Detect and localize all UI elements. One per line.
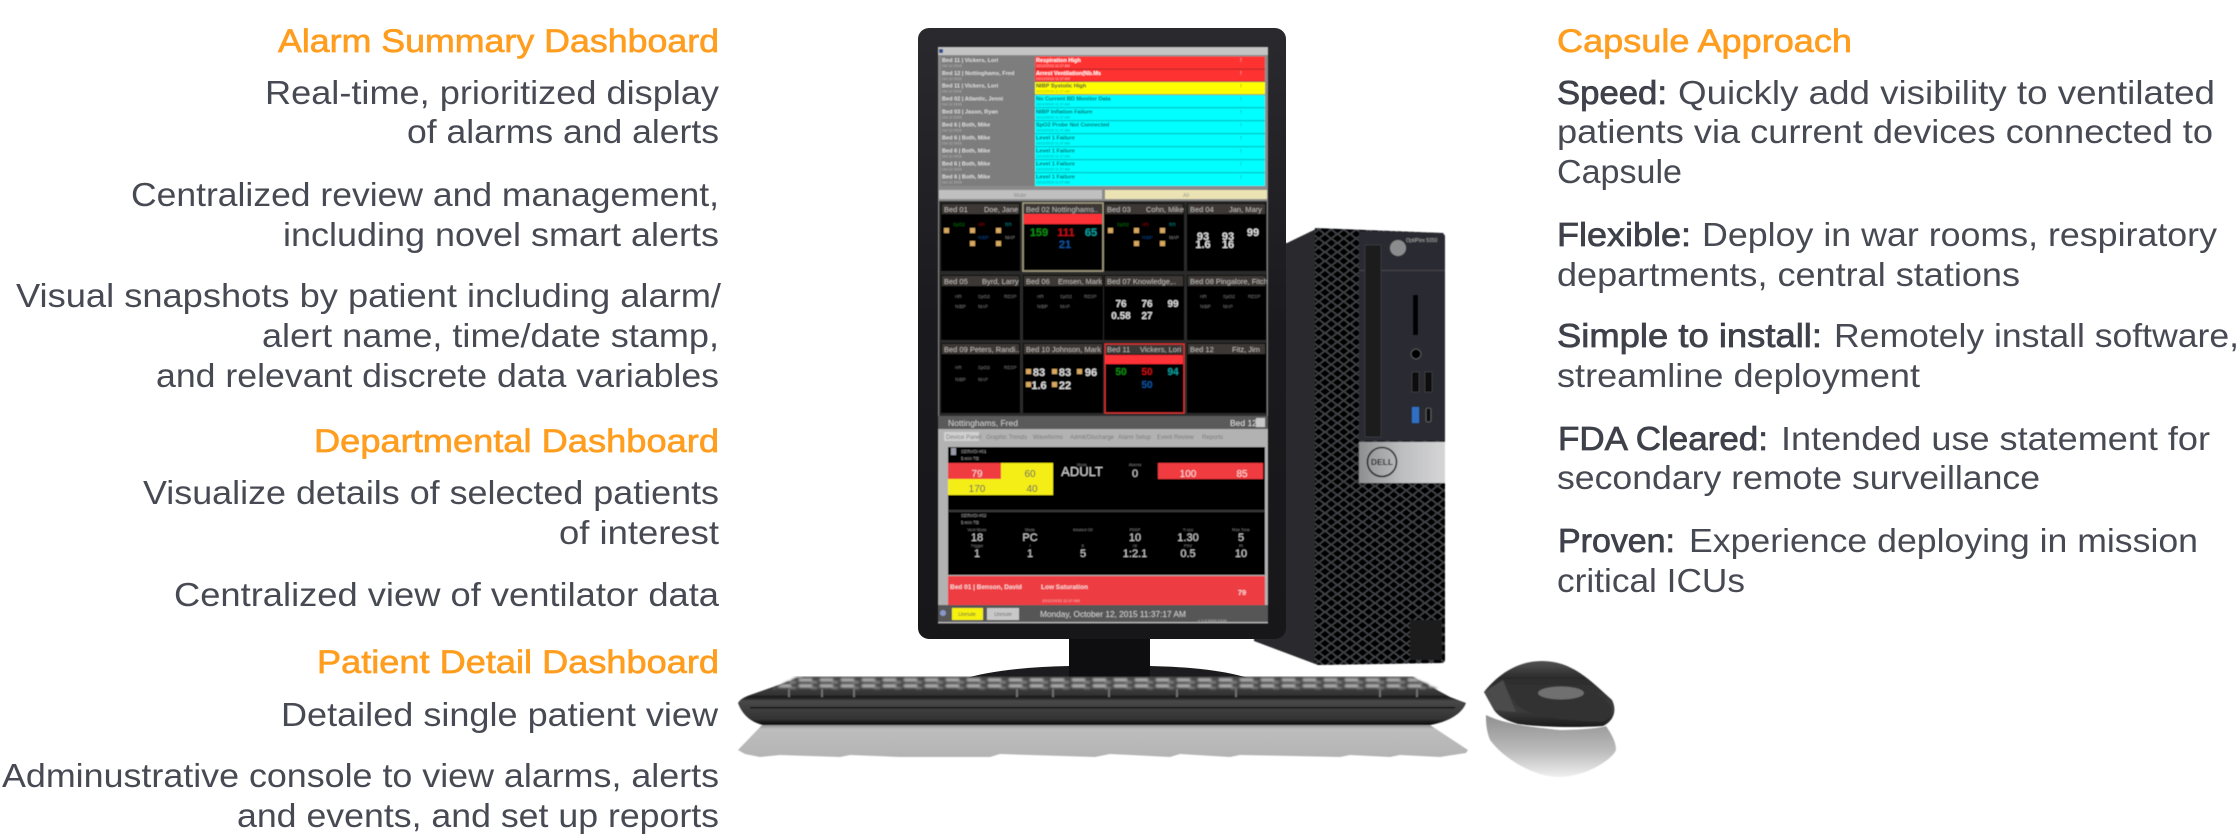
bed grid: Bed 06: [1026, 277, 1050, 286]
bed grid: Jan, Mary: [1229, 205, 1262, 214]
bed vitals: 50: [1115, 367, 1127, 378]
bed grid: HR: [1200, 294, 1207, 299]
device values: alarm tiles: ADULT: [1061, 464, 1103, 479]
bed vitals: 1.6: [1195, 239, 1211, 251]
filter buttons: [939, 190, 1267, 199]
bed grid: Bed 03: [1107, 205, 1131, 214]
ventilator values: [971, 532, 1247, 560]
alarm summary table: 10/12/2015 11:37 AM: [1036, 142, 1070, 146]
bed grid: HR: [978, 222, 985, 227]
alarm summary table: SpO2 Probe Not Connected: [1036, 122, 1110, 128]
bed vitals: 16: [1222, 239, 1234, 251]
text: real-time display: Real-time, prioritized display: [265, 74, 720, 111]
bed grid: NIBP: [1142, 235, 1153, 240]
bed grid: Bed 09 Peters, Randi..: [944, 345, 1019, 354]
text: visual snapshots: Visual snapshots by patient including alarm/: [16, 277, 722, 314]
bed grid: HR: [1142, 222, 1149, 227]
heading: Departmental Dashboard: Departmental Dashboard: [314, 423, 719, 459]
patient detail panel: Rise Time: [1232, 527, 1251, 532]
text: proven: [1557, 522, 2198, 599]
bed vitals: 96: [1085, 367, 1097, 379]
text: speed: patients via current devices connected to: [1557, 113, 2213, 150]
alarm summary table: Bed 11 | Vickers, Lori: [942, 58, 999, 64]
alarm summary table: No Current BD Monitor Data: [1036, 96, 1111, 102]
alarm summary table: Oct 12 2015: [942, 154, 962, 158]
bed grid: SpO2: [1117, 222, 1129, 227]
alarm summary table: Bed 03 | Jason, Ryan: [942, 110, 999, 116]
bed grid: Bed 12: [1190, 345, 1214, 354]
text: centralized review: [131, 176, 719, 253]
filter buttons: All: [1183, 193, 1189, 199]
text: real-time display: of alarms and alerts: [407, 113, 719, 150]
text: visual snapshots: and relevant discrete data variables: [156, 357, 719, 394]
text: proven: critical ICUs: [1557, 562, 1745, 599]
bed grid: NIBP: [955, 304, 966, 309]
text: visual snapshots: [16, 277, 722, 394]
patient detail panel: E: [1082, 543, 1085, 548]
device values: alarm tiles: [948, 463, 1263, 495]
alarm summary table: 10/12/2015 11:37 AM: [1036, 168, 1070, 172]
ventilator values: 5: [1238, 532, 1244, 544]
status bar: Monday, October 12, 2015 11:37:17 AM: [1040, 609, 1186, 619]
alarm summary table: Respiration High: [1036, 58, 1081, 64]
patient detail tabs: Graphic Trends: [986, 435, 1027, 441]
bed grid: HR: [955, 365, 962, 370]
alarm summary table: Level 1 Failure: [1036, 148, 1075, 154]
bed vitals: 0.58: [1111, 311, 1131, 322]
alarm summary table: 10/12/2015 11:37 AM: [1036, 180, 1070, 184]
alarm summary table: Bed 6 | Both, Mike: [942, 174, 990, 180]
text: centralized review: including novel smart alerts: [283, 216, 719, 253]
patient alarm band: Bed 01 | Benson, David: [950, 584, 1022, 591]
text: simple to install: [1557, 317, 2239, 394]
device values: alarm tiles: 79: [971, 469, 983, 480]
patient detail panel: Vent Mode: [967, 527, 987, 532]
alarm summary table: 10/12/2015 11:37 AM: [1036, 90, 1070, 94]
text: simple to install: Simple to install:: [1557, 317, 1822, 354]
monitor: [918, 28, 1286, 639]
monitor bezel: [918, 28, 1286, 639]
bed grid: Bed 07 Knowledge,..: [1107, 277, 1176, 286]
bed vitals: 50: [1141, 367, 1153, 378]
keyboard keys: [772, 677, 1438, 689]
alarm summary table: Bed 02 | Atlantic, Jenni: [942, 96, 1003, 102]
patient alarm band: Low Saturation: [1041, 584, 1088, 591]
text: administrative console: Adminustrative console to view alarms, alerts: [2, 757, 719, 794]
bed grid: Bed 02 Nottinghams..: [1026, 205, 1098, 214]
text: speed: Speed:: [1557, 74, 1667, 111]
bed vitals: 99: [1247, 227, 1259, 239]
bed grid: SpO2: [978, 294, 990, 299]
patient detail panel: PSV: [1184, 543, 1192, 548]
text: visualize details: [143, 474, 719, 551]
bed vitals: 93: [1222, 231, 1234, 243]
status bar: v 1.0.0000.0100: [1198, 618, 1227, 623]
text: centralized review: Centralized review and management,: [131, 176, 719, 213]
bed grid: Emsen, Mark: [1058, 277, 1102, 286]
text: simple to install: Remotely install software,: [1834, 317, 2239, 354]
bed vitals: 27: [1141, 311, 1153, 322]
power button: [1390, 240, 1406, 256]
alarm summary table: Oct 12 2015: [942, 77, 962, 81]
alarm summary table: Bed 11 | Vickers, Lori: [942, 84, 999, 90]
alarm summary table: !: [1240, 123, 1242, 129]
bed grid: Fitz, Jim: [1232, 345, 1260, 354]
alarm summary table: 10/12/2015 11:37 AM: [1036, 64, 1070, 68]
bed vitals: 50: [1141, 380, 1153, 391]
alarm summary table: !: [1240, 84, 1242, 90]
left column: dashboard descriptions: [2, 23, 722, 834]
patient detail panel: [938, 416, 1268, 605]
heading: Patient Detail Dashboard: Patient Detail Dashboard: [317, 644, 719, 680]
keyboard: [738, 677, 1466, 725]
status bar: [938, 605, 1268, 624]
patient detail panel: Mode: [1077, 462, 1088, 467]
alarm summary table: 10/12/2015 11:37 AM: [1036, 128, 1070, 132]
bed vitals: 99: [1167, 299, 1179, 310]
alarm summary table: NIBP Systolic High: [1036, 84, 1087, 90]
bed vitals: 93: [1197, 231, 1209, 243]
text: visualize details: Visualize details of selected patients: [143, 474, 719, 511]
alarm summary table: Level 1 Failure: [1036, 162, 1075, 168]
selected bed highlight: [1023, 203, 1184, 413]
alarm summary table: !: [1240, 71, 1242, 77]
bed grid: SpO2: [1223, 294, 1235, 299]
reflection: keyboard: [738, 725, 1468, 757]
alarm summary table: Bed 6 | Both, Mike: [942, 136, 990, 142]
bed grid: SpO2: [978, 365, 990, 370]
patient detail panel: Pi: [1239, 543, 1243, 548]
text: flexible: Deploy in war rooms, respiratory: [1702, 216, 2218, 253]
alarm summary table: !: [1240, 110, 1242, 116]
filter buttons: Mute: [1014, 193, 1026, 199]
alarm summary table: !: [1240, 162, 1242, 168]
device values: alarm tiles: 60: [1024, 469, 1036, 480]
monitor stand neck: [1069, 636, 1150, 680]
alarm summary table: Oct 12 2015: [942, 180, 962, 184]
bed grid: Bed 01: [944, 205, 968, 214]
text: FDA cleared: secondary remote surveillance: [1557, 459, 2040, 496]
patient alarm band: 10/12/2015 11:37 AM: [1042, 598, 1080, 603]
alarm summary table: Oct 12 2015: [942, 142, 962, 146]
bed grid: Doe, Jane: [984, 205, 1018, 214]
text: speed: Quickly add visibility to ventilated: [1678, 74, 2215, 111]
patient detail panel: Ti sec: [1183, 527, 1193, 532]
alarm summary table: !: [1240, 97, 1242, 103]
alarm summary table: Bed 6 | Both, Mike: [942, 162, 990, 168]
bed grid: NIBP: [978, 235, 989, 240]
bed grid: [939, 201, 1268, 416]
text: centralized view: Centralized view of ventilator data: [174, 576, 720, 613]
ventilator values: 1: [1027, 548, 1033, 560]
bed grid: Byrd, Larry: [982, 277, 1019, 286]
alarm summary table: Bed 6 | Both, Mike: [942, 122, 990, 128]
alarm summary table: Oct 12 2015: [942, 116, 962, 120]
monitor stand base: [960, 666, 1255, 680]
ventilator values: 18: [971, 532, 983, 544]
bed vitals: 83: [1033, 367, 1045, 379]
patient detail panel: Mode: [1025, 527, 1036, 532]
patient detail panel: Alarms: [1129, 462, 1141, 467]
alarm summary table: Level 1 Failure: [1036, 136, 1075, 142]
device values: alarm tiles: 100: [1180, 469, 1197, 480]
alarm summary table: Oct 12 2015: [942, 90, 962, 94]
alarm summary table: !: [1240, 58, 1242, 64]
ventilator values: 5: [1080, 548, 1086, 560]
device values: alarm tiles: 85: [1236, 469, 1248, 480]
bed grid: SpO2: [1060, 294, 1072, 299]
ventilator values: 1.30: [1177, 532, 1199, 544]
alarm summary table: 10/12/2015 11:37 AM: [1036, 77, 1070, 81]
text: speed: [1557, 74, 2215, 190]
bed grid: Bed 10 Johnson, Mark: [1026, 345, 1101, 354]
alarm summary table: !: [1240, 149, 1242, 155]
bed vitals: 83: [1059, 367, 1071, 379]
text: speed: Capsule: [1557, 153, 1682, 190]
ventilator values: 1:2.1: [1123, 548, 1147, 560]
patient detail tabs: Reports: [1202, 435, 1223, 441]
text: flexible: [1557, 216, 2218, 293]
bed grid: HR: [955, 294, 962, 299]
patient alarm band: 79: [1238, 588, 1246, 597]
text: flexible: departments, central stations: [1557, 256, 2020, 293]
patient detail panel: PEEP: [1130, 527, 1141, 532]
patient detail panel: Trigger: [971, 543, 984, 548]
device values: alarm tiles: 170: [969, 484, 986, 495]
alarm summary table: Bed 6 | Both, Mike: [942, 148, 990, 154]
bed grid: RR: [1005, 222, 1012, 227]
ventilator values: 10: [1235, 548, 1247, 560]
alarm summary table: Oct 12 2015: [942, 168, 962, 172]
patient detail panel: SERVOi #01: [961, 449, 987, 454]
patient detail tabs: Event Review: [1157, 435, 1194, 441]
patient detail panel: 5 min TB: [961, 456, 979, 461]
patient detail panel: I: [1029, 543, 1031, 548]
patient detail panel: Inhaled O2: [1073, 527, 1094, 532]
bed grid: Vickers, Lori: [1140, 345, 1181, 354]
text: flexible: Flexible:: [1557, 216, 1691, 253]
bed grid: Bed 08 Pingalore, Fitch: [1190, 277, 1268, 286]
monitor screen: [938, 47, 1268, 624]
alarm summary table: NIBP Inflation Failure: [1036, 110, 1092, 116]
silver band with Dell logo: [1359, 442, 1445, 483]
patient detail panel: SERVOi #02: [961, 513, 987, 518]
text: FDA cleared: [1557, 420, 2210, 496]
desktop tower: OptiPlex 5050: [1406, 238, 1438, 244]
device values: alarm tiles: 40: [1026, 484, 1038, 495]
bed grid: MAP: [1005, 235, 1015, 240]
text: detailed patient view: Detailed single patient view: [281, 696, 718, 733]
bed grid: Cohn, Mike: [1146, 205, 1184, 214]
patient detail panel: Nottinghams, Fred: [948, 418, 1018, 428]
bed vitals: 65: [1085, 227, 1097, 239]
alarm summary table: [941, 56, 1265, 186]
text: FDA cleared: Intended use statement for: [1781, 420, 2210, 457]
text: visualize details: of interest: [559, 514, 719, 551]
text: proven: Proven:: [1558, 522, 1675, 559]
bed grid: NIBP: [1037, 304, 1048, 309]
text: real-time display: [265, 74, 720, 150]
bed vitals: 94: [1167, 367, 1179, 378]
status bar: Unmute: [958, 612, 976, 618]
alarm summary table: Oct 12 2015: [942, 102, 962, 106]
patient detail tabs: [944, 432, 1223, 441]
bed grid: Bed 11: [1107, 345, 1130, 354]
bed grid: RESP: [1248, 294, 1261, 299]
bed grid: SpO2: [953, 222, 965, 227]
alarm summary table: Arrest Ventilation(Nb.Ms: [1036, 71, 1101, 77]
bed vitals: 159: [1030, 227, 1048, 239]
alarm summary table: Oct 12 2015: [942, 64, 962, 68]
bed grid: RESP: [1004, 365, 1017, 370]
alarm summary table: 10/12/2015 11:37 AM: [1036, 102, 1070, 106]
patient detail tabs: Alarm Setup: [1118, 435, 1152, 441]
patient detail tabs: Device Panel: [946, 435, 981, 441]
patient detail panel: I:E: [1133, 543, 1138, 548]
bed grid: MAP: [1060, 304, 1070, 309]
bed grid: RR: [1169, 222, 1176, 227]
patient detail panel: Bed 12: [1230, 418, 1257, 428]
bed grid: NIBP: [955, 377, 966, 382]
alarm summary table: !: [1240, 175, 1242, 181]
bed grid: MAP: [978, 304, 988, 309]
alarm summary table: 10/12/2015 11:37 AM: [1036, 116, 1070, 120]
right column: Capsule Approach: [1557, 23, 2239, 599]
text: proven: Experience deploying in mission: [1689, 522, 2198, 559]
status bar: Unmute: [994, 612, 1012, 618]
alarm summary table: 10/12/2015 11:37 AM: [1036, 154, 1070, 158]
bed vitals: 22: [1059, 380, 1071, 392]
text: administrative console: [2, 757, 719, 834]
bed vitals: 76: [1115, 299, 1127, 310]
bed grid: NIBP: [1200, 304, 1211, 309]
alarm summary table: !: [1240, 136, 1242, 142]
bed vitals: 111: [1057, 227, 1075, 239]
bed grid: HR: [1037, 294, 1044, 299]
heading: Alarm Summary Dashboard: Alarm Summary Dashboard: [278, 23, 719, 59]
bed vitals: 76: [1141, 299, 1153, 310]
patient detail panel: 5 min TB: [961, 520, 979, 525]
reflection: mouse: [1486, 715, 1616, 777]
bed grid: RESP: [1004, 294, 1017, 299]
bed grid: RESP: [1084, 294, 1097, 299]
bed grid: Bed 05: [944, 277, 968, 286]
silver band with Dell logo: DELL: [1371, 457, 1393, 467]
ventilator values: 0.5: [1180, 548, 1196, 560]
patient detail tabs: Waveforms: [1033, 435, 1063, 441]
bed grid: MAP: [978, 377, 988, 382]
ventilator values: PC: [1022, 532, 1038, 544]
text: administrative console: and events, and set up reports: [237, 797, 719, 834]
bed vitals: 1.6: [1031, 380, 1047, 392]
bed vitals: [1030, 227, 1259, 392]
ventilator values: 1: [974, 548, 980, 560]
desktop tower: [1254, 228, 1445, 665]
heading: Capsule Approach: Capsule Approach: [1557, 23, 1852, 59]
patient detail tabs: Admit/Discharge: [1070, 435, 1115, 441]
bed vitals: 21: [1059, 239, 1071, 251]
mouse: [1484, 661, 1614, 727]
alarm summary table: Bed 12 | Nottinghams, Fred: [942, 71, 1015, 77]
bed grid: MAP: [1169, 235, 1179, 240]
bed grid: MAP: [1223, 304, 1233, 309]
text: simple to install: streamline deployment: [1557, 357, 1920, 394]
patient alarm band: [948, 576, 1265, 605]
text: visual snapshots: alert name, time/date stamp,: [262, 317, 719, 354]
alarm summary table: Level 1 Failure: [1036, 174, 1075, 180]
alarm summary table: Oct 12 2015: [942, 128, 962, 132]
bed grid: Bed 04: [1190, 205, 1214, 214]
text: FDA cleared: FDA Cleared:: [1558, 420, 1768, 457]
device values: alarm tiles: 0: [1132, 468, 1138, 480]
ventilator values: 10: [1129, 532, 1141, 544]
